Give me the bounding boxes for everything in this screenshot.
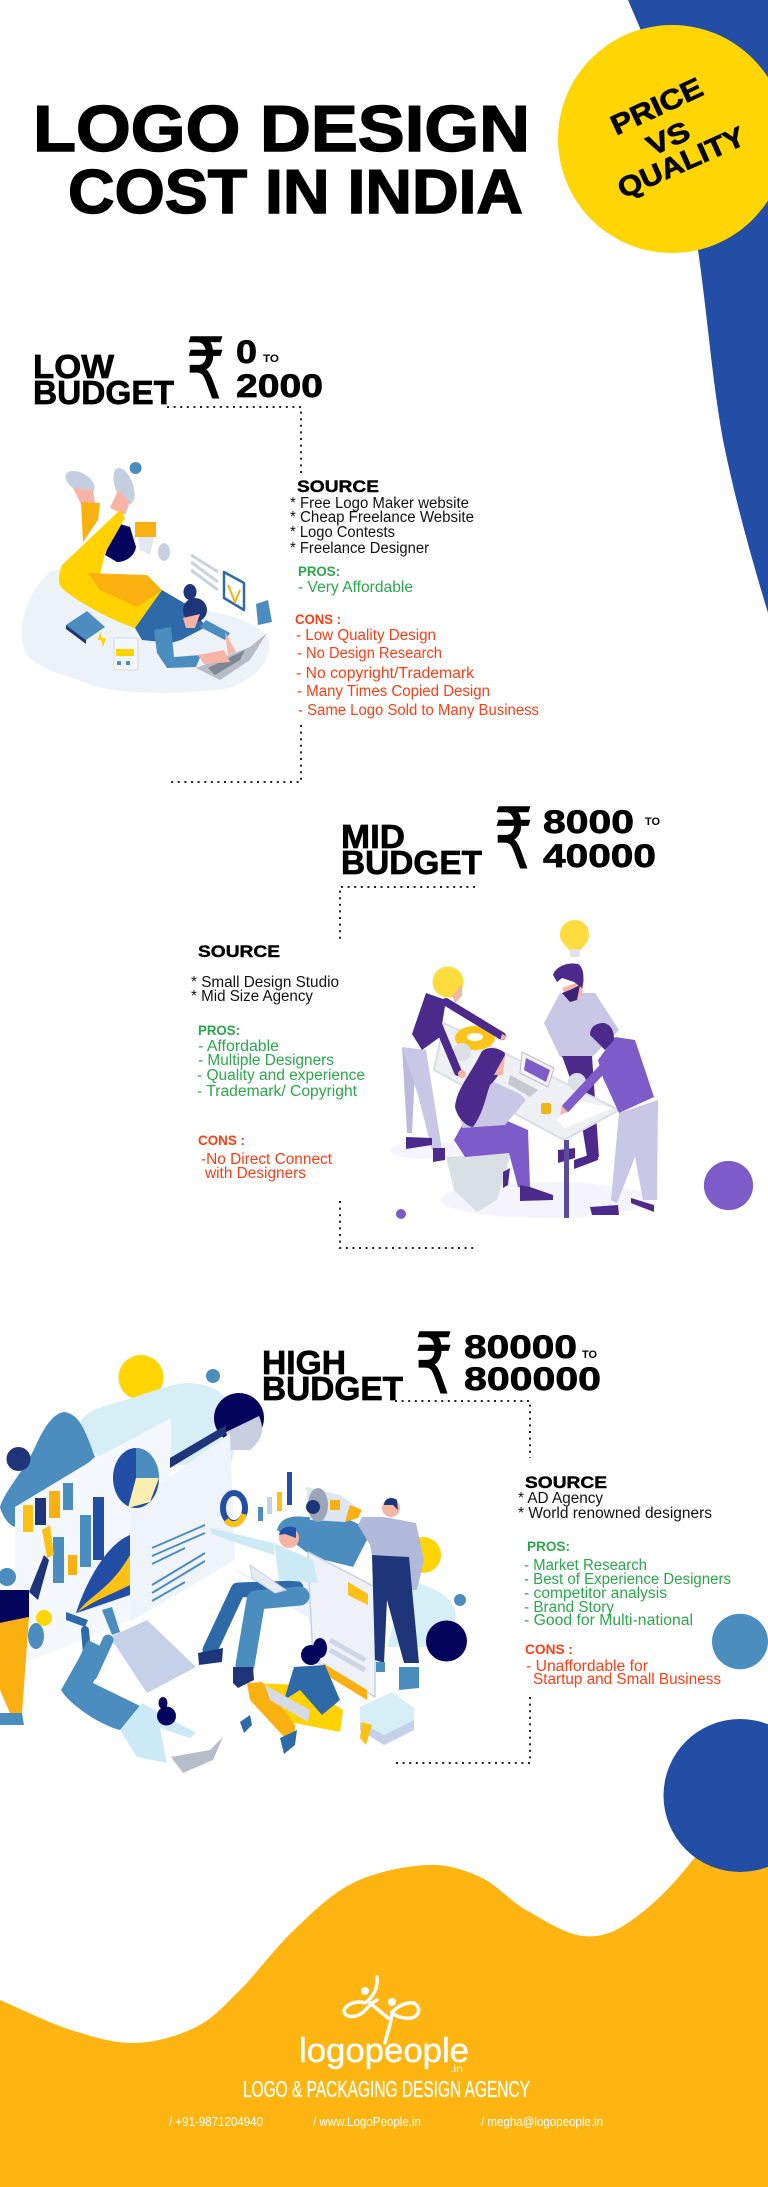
- pros: - Trademark/ Copyright: [197, 1083, 358, 1100]
- pros: [298, 563, 413, 596]
- source list: * Cheap Freelance Website: [290, 509, 474, 526]
- source list: SOURCE: [297, 477, 379, 496]
- cons: -No Direct Connect: [201, 1151, 333, 1168]
- pros: - Multiple Designers: [198, 1052, 334, 1069]
- badge: price vs quality: PRICE: [606, 72, 708, 141]
- pros: [197, 1022, 365, 1100]
- blue circle over wave: [664, 1719, 768, 1872]
- source list: * Freelance Designer: [290, 540, 429, 557]
- footer logo: .in: [450, 2064, 463, 2075]
- price: 80000 to 800000: TO: [582, 1349, 597, 1361]
- heading: low budget: [33, 348, 174, 411]
- source list: * Small Design Studio: [191, 974, 339, 991]
- contact details: / megha@logopeople.in: [481, 2114, 603, 2129]
- price: 80000 to 800000: [415, 1317, 601, 1411]
- price: 8000 to 40000: 8000: [543, 804, 634, 840]
- price: 0 to 2000: TO: [263, 353, 279, 365]
- illustration: data team: [0, 1355, 467, 1773]
- price: 8000 to 40000: TO: [645, 816, 660, 828]
- cons: with Designers: [204, 1165, 306, 1182]
- source list: * Mid Size Agency: [191, 988, 313, 1005]
- contact details: / www.LogoPeople.in: [313, 2114, 421, 2129]
- illustration: woman lying with laptop: [22, 462, 272, 693]
- cons: - Same Logo Sold to Many Business: [298, 702, 539, 719]
- cons: CONS :: [295, 611, 341, 627]
- heading: mid budget: BUDGET: [341, 844, 482, 881]
- panel: high budget: [0, 1317, 768, 1773]
- price: 8000 to 40000: ₹: [494, 792, 533, 886]
- pros: - Best of Experience Designers: [524, 1571, 731, 1588]
- illustration: team around a table: [390, 920, 753, 1219]
- title: LOGO DESIGN: [33, 92, 530, 165]
- cons: - Unaffordable for: [526, 1658, 648, 1675]
- source list: * Free Logo Maker website: [290, 495, 469, 512]
- blue dot: [712, 1614, 768, 1669]
- title: [33, 92, 530, 227]
- contact details: [169, 2114, 603, 2129]
- cons: CONS :: [525, 1641, 573, 1657]
- dotted connector top: [167, 407, 301, 473]
- dotted connector top: [340, 887, 475, 943]
- cons: [525, 1641, 721, 1688]
- cons: Startup and Small Business: [533, 1671, 721, 1688]
- cons: - No copyright/Trademark: [296, 665, 474, 682]
- source list: [191, 942, 339, 1005]
- heading: low budget: LOW: [33, 348, 115, 385]
- icon: light bulb: [560, 920, 589, 957]
- price: 0 to 2000: [186, 322, 323, 416]
- price: 80000 to 800000: ₹: [415, 1317, 453, 1411]
- contact details: / +91-9871204940: [169, 2114, 263, 2129]
- pros: - Affordable: [198, 1038, 279, 1055]
- large purple dot: [704, 1161, 753, 1210]
- cons: - Many Times Copied Design: [297, 683, 490, 700]
- heading: mid budget: MID: [341, 818, 405, 855]
- icon: logopeople mark: [344, 1977, 419, 2043]
- price: 0 to 2000: 0: [236, 334, 257, 370]
- price: 8000 to 40000: [494, 792, 660, 886]
- badge: price vs quality: [558, 25, 768, 253]
- heading: high budget: BUDGET: [262, 1370, 403, 1407]
- small purple dot: [396, 1209, 406, 1219]
- price: 80000 to 800000: 80000: [464, 1329, 577, 1365]
- blue corner shape: [628, 0, 768, 613]
- heading: mid budget: [341, 818, 482, 881]
- cons: [295, 611, 539, 719]
- footer logo: logopeople: [299, 2032, 469, 2070]
- heading: low budget: BUDGET: [33, 374, 174, 411]
- source list: [518, 1473, 712, 1522]
- source list: * Logo Contests: [290, 524, 395, 541]
- price: 8000 to 40000: 40000: [543, 838, 656, 874]
- cons: [198, 1132, 333, 1182]
- heading: high budget: [262, 1344, 403, 1407]
- badge: price vs quality: QUALITY: [613, 120, 750, 204]
- heading: high budget: HIGH: [262, 1344, 346, 1381]
- source list: [290, 477, 474, 557]
- source list: SOURCE: [198, 942, 280, 961]
- pros: PROS:: [527, 1538, 570, 1554]
- footer wave: [0, 1740, 768, 2187]
- source list: * AD Agency: [518, 1490, 603, 1507]
- cons: - Low Quality Design: [296, 627, 436, 644]
- price: 0 to 2000: ₹: [186, 322, 225, 416]
- badge: price vs quality: VS: [642, 115, 695, 162]
- dotted connector top: [395, 1401, 530, 1458]
- pros: - Very Affordable: [298, 579, 413, 596]
- pros: PROS:: [298, 563, 340, 579]
- pros: - Good for Multi-national: [524, 1612, 693, 1629]
- tagline: LOGO & PACKAGING DESIGN AGENCY: [243, 2076, 530, 2102]
- footer logo: [299, 1977, 469, 2075]
- dotted connector bottom: [167, 725, 301, 782]
- price: 0 to 2000: 2000: [236, 368, 323, 404]
- dotted connector bottom: [395, 1697, 530, 1763]
- pros: [524, 1538, 731, 1629]
- pros: - Brand Story: [524, 1599, 614, 1616]
- panel: mid budget: [191, 792, 753, 1248]
- pros: - Quality and experience: [197, 1067, 365, 1084]
- panel: low budget: [22, 322, 539, 782]
- title: COST IN INDIA: [68, 158, 523, 227]
- price: 80000 to 800000: 800000: [464, 1361, 601, 1397]
- pros: PROS:: [198, 1022, 240, 1038]
- cons: - No Design Research: [297, 645, 442, 662]
- source list: SOURCE: [525, 1473, 607, 1492]
- dotted connector bottom: [340, 1201, 475, 1248]
- cons: CONS :: [198, 1132, 245, 1148]
- pros: - Market Research: [524, 1557, 647, 1574]
- pros: - competitor analysis: [524, 1585, 667, 1602]
- source list: * World renowned designers: [518, 1505, 712, 1522]
